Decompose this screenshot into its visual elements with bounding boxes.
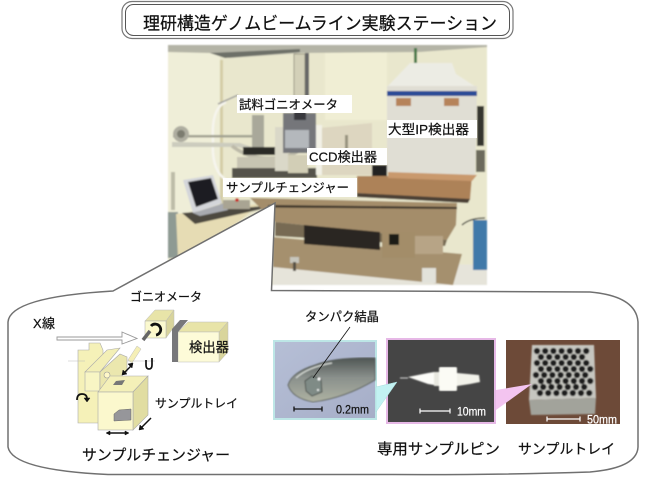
lower stage xyxy=(273,237,462,285)
label: large IP detector: 大型IP検出器 xyxy=(388,122,469,137)
label: X-ray: X線 xyxy=(33,316,55,331)
beam pipes xyxy=(173,135,253,138)
label: sample tray caption: サンプルトレイ xyxy=(518,441,615,457)
label: goniometer: ゴニオメータ xyxy=(130,289,202,304)
callout wedge: crystal to pin xyxy=(376,382,397,412)
motion arrows xyxy=(77,358,152,435)
label: protein crystal: タンパク結晶 xyxy=(305,310,379,324)
blue container xyxy=(473,220,487,270)
goniometer head xyxy=(143,310,174,340)
middle stage xyxy=(250,198,457,240)
label: CCD detector: CCD検出器 xyxy=(309,150,377,164)
callout wedge: pin to tray xyxy=(496,384,532,410)
label: protein crystal xyxy=(305,310,379,378)
panel: sample tray photo xyxy=(506,340,620,426)
title xyxy=(122,2,513,38)
panel: sample pin photo: 10mm xyxy=(457,404,486,418)
label: sample changer: サンプルチェンジャー xyxy=(226,181,349,195)
detector: 検出器 xyxy=(189,340,229,355)
monitor and desk area xyxy=(168,212,178,258)
CCD detector xyxy=(320,123,372,175)
panel: protein crystal photo xyxy=(274,341,376,419)
panel: sample tray photo: 50mm xyxy=(587,412,617,426)
upper stage xyxy=(357,176,472,200)
label: sample goniometer: 試料ゴニオメータ xyxy=(239,97,338,112)
label: sample goniometer xyxy=(237,95,352,113)
sample tray block xyxy=(98,376,148,430)
label: sample tray: サンプルトレイ xyxy=(155,396,238,410)
label: dedicated sample pin: 専用サンプルピン xyxy=(377,441,500,458)
label: sample changer xyxy=(223,178,357,197)
goniometer machinery xyxy=(252,115,264,147)
IP detector xyxy=(387,63,476,87)
panel: beamline photograph xyxy=(168,45,487,285)
panel: protein crystal photo: 0.2mm xyxy=(336,402,369,416)
floor xyxy=(273,260,487,285)
callout bubble xyxy=(8,203,638,475)
panel: sample pin photo xyxy=(387,339,495,423)
label: sample changer caption: サンプルチェンジャー xyxy=(82,447,230,464)
detector xyxy=(172,320,229,362)
sample changer body xyxy=(68,343,155,430)
panel: sample changer schematic xyxy=(33,289,238,464)
title: 理研構造ゲノムビームライン実験ステーション xyxy=(143,14,497,34)
arrow: X-ray beam xyxy=(57,332,137,344)
